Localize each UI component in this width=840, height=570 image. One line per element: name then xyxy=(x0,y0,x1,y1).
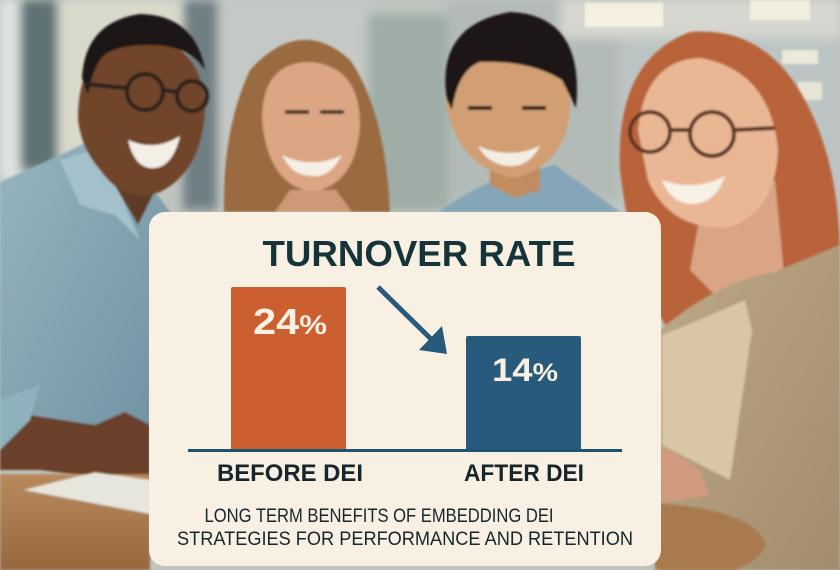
title: TURNOVER RATE xyxy=(262,233,576,274)
table xyxy=(0,472,766,570)
caption: STRATEGIES FOR PERFORMANCE AND RETENTION xyxy=(177,529,633,550)
person 4: woman with red hair and glasses xyxy=(620,31,840,570)
bar: before DEI 24% xyxy=(231,287,346,451)
bar: after DEI 14% xyxy=(466,336,581,451)
caption xyxy=(177,506,633,550)
bar: after DEI 14%: 14% xyxy=(492,352,558,388)
caption: LONG TERM BENEFITS OF EMBEDDING DEI xyxy=(204,506,554,527)
infographic card xyxy=(149,212,661,566)
person 2: woman with brown hair xyxy=(224,40,390,212)
person 1: man in blue shirt xyxy=(0,14,207,480)
label: after DEI: AFTER DEI xyxy=(464,460,584,487)
label: before DEI: BEFORE DEI xyxy=(217,460,363,487)
bar: before DEI 24%: 24% xyxy=(253,301,327,342)
baseline xyxy=(188,449,622,452)
person 3: man with dark hair xyxy=(438,12,620,212)
arrow: downward trend xyxy=(378,287,447,354)
